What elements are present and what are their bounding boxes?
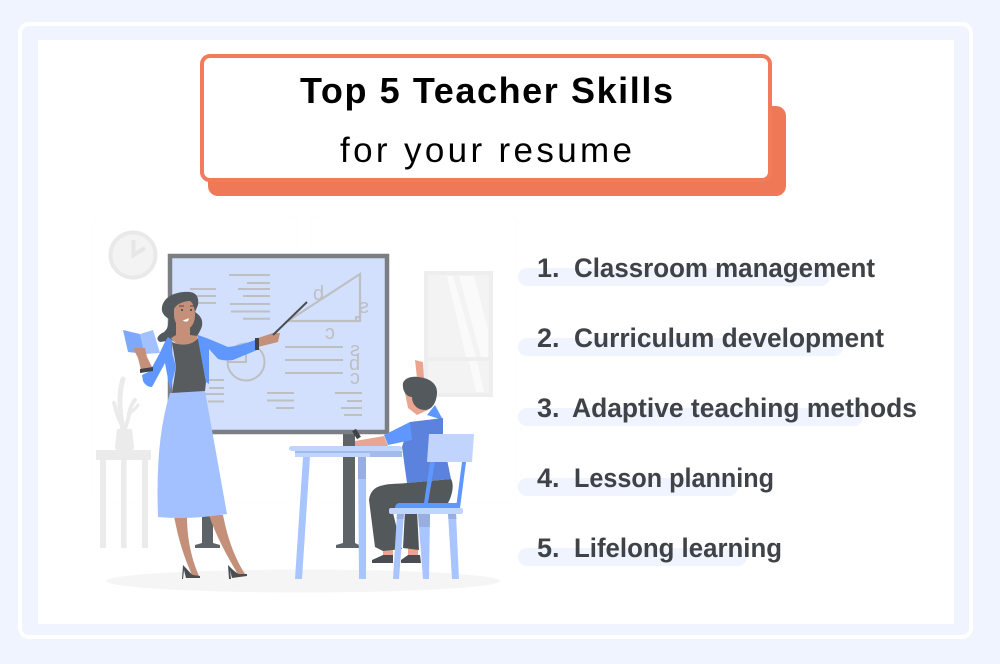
whiteboard: c (350, 367, 360, 389)
whiteboard: d (313, 283, 324, 305)
icon: wall clock (110, 232, 156, 278)
skill 1: Classroom management (574, 253, 875, 283)
right hand (258, 333, 280, 347)
sleeve (384, 422, 412, 445)
pointer (273, 302, 307, 335)
hair (403, 377, 437, 410)
back leg (403, 510, 419, 550)
legs (174, 516, 199, 577)
skill 1: 1. (537, 253, 560, 283)
skill 2: 2. (537, 323, 560, 353)
skills list (518, 253, 917, 566)
skill 5: 5. (537, 533, 560, 563)
chair (389, 434, 474, 579)
skill 3: 3. (537, 393, 560, 423)
book (123, 330, 145, 354)
raised hand (415, 360, 424, 378)
skirt (158, 391, 227, 518)
window (426, 273, 491, 395)
student (354, 360, 453, 563)
heading: Top 5 Teacher Skills (300, 70, 673, 111)
skill 5 (518, 533, 782, 566)
whiteboard: s (359, 296, 369, 318)
arm (355, 436, 388, 446)
skill 3: Adaptive teaching methods (572, 393, 917, 423)
whiteboard: d (349, 353, 360, 375)
desk (289, 446, 402, 579)
skill 4 (518, 463, 774, 496)
skill 2: Curriculum development (574, 323, 884, 353)
board stands (195, 434, 359, 548)
pants (369, 479, 453, 551)
title shadow (208, 106, 786, 196)
back sleeve (427, 405, 443, 420)
subheading: for your resume (340, 131, 632, 170)
teacher (123, 292, 307, 579)
whiteboard (170, 256, 387, 432)
skill 4: 4. (537, 463, 560, 493)
skill 4: Lesson planning (574, 463, 774, 493)
whiteboard: c (325, 322, 335, 344)
face (174, 301, 195, 330)
whiteboard: s (350, 339, 360, 361)
title box (202, 56, 770, 180)
title block (202, 56, 786, 196)
plant on side table (96, 379, 151, 548)
shirt (172, 338, 206, 393)
torso (402, 418, 451, 483)
jacket (142, 337, 176, 390)
pen (354, 430, 359, 438)
floor shadow (106, 570, 500, 592)
skill 5: Lifelong learning (574, 533, 782, 563)
hair (157, 292, 202, 342)
left hand (133, 348, 153, 370)
illustration: teacher and student in classroom (92, 216, 517, 592)
face and neck (405, 392, 428, 415)
shoes (182, 565, 200, 579)
shoes (372, 555, 393, 563)
neck and chest (171, 322, 198, 346)
